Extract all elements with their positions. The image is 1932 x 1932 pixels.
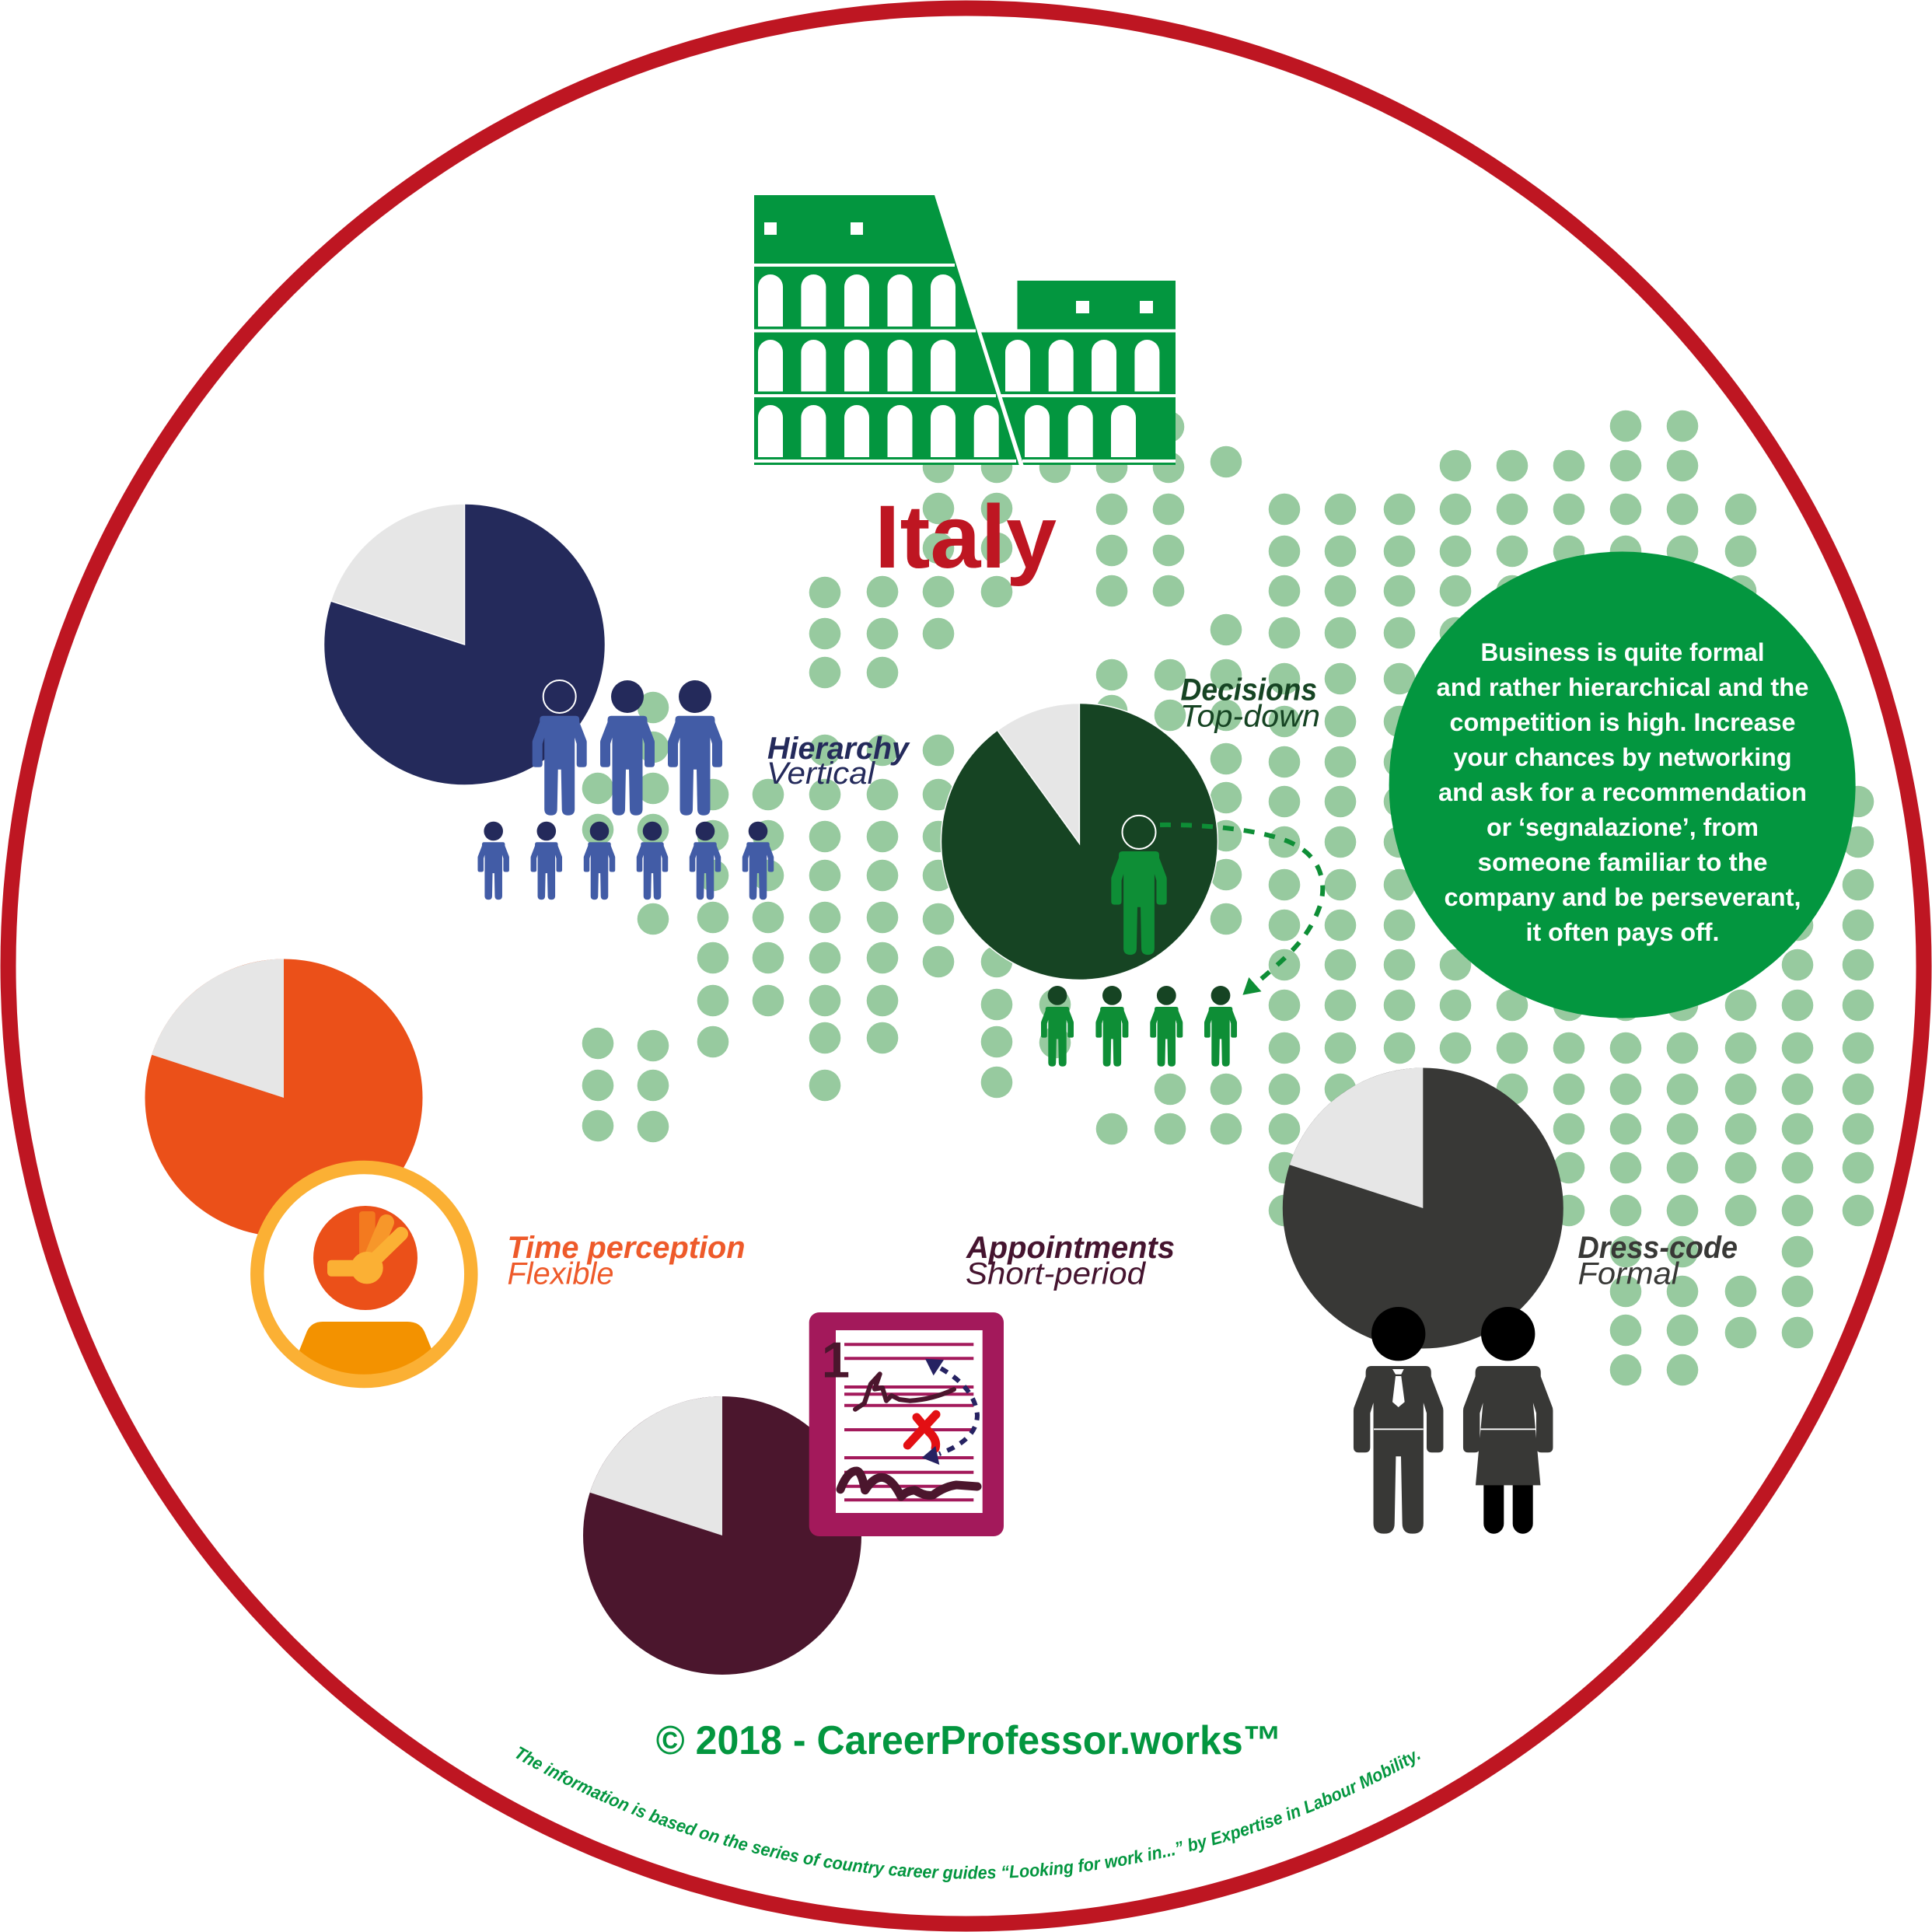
- callout text: it often pays off.: [1525, 918, 1720, 946]
- label: dress-code: Formal: [1578, 1257, 1679, 1291]
- panel: time perception: [145, 959, 745, 1399]
- pie chart: time perception: [145, 959, 423, 1236]
- callout text: company and be perseverant,: [1445, 883, 1801, 911]
- callout: advice circle: [1389, 552, 1856, 1018]
- copyright: © 2018 - CareerProfessor.works™: [656, 1718, 1282, 1763]
- callout text: or ‘segnalazione’, from: [1487, 813, 1759, 841]
- icon: person with clock: [257, 1168, 471, 1399]
- label: hierarchy: Hierarchy: [767, 732, 910, 766]
- label: time perception: [507, 1231, 745, 1291]
- label: dress-code: Dress-code: [1578, 1231, 1738, 1265]
- icon: man in suit: [1354, 1307, 1443, 1534]
- pie chart: appointments: [583, 1396, 861, 1675]
- label: time perception: Flexible: [507, 1257, 614, 1291]
- label: appointments: Appointments: [966, 1231, 1175, 1265]
- source note on curve: The information is based on the series of country career guides “Looking for work in...” by Expertise in Labour Mobility.: [515, 1746, 1420, 1882]
- pie chart: decisions: [941, 703, 1218, 980]
- icon: six staff: [477, 822, 774, 900]
- callout text: and ask for a recommendation: [1438, 778, 1807, 806]
- icon: Colosseum: [754, 195, 1176, 465]
- title: Italy: [875, 487, 1057, 587]
- panel: appointments: [583, 1231, 1175, 1675]
- label: hierarchy: [767, 732, 910, 791]
- callout text: and rather hierarchical and the: [1437, 673, 1808, 701]
- dotted world map: [598, 426, 1858, 1370]
- label: appointments: Short-period: [966, 1257, 1147, 1291]
- callout text: Business is quite formal: [1480, 638, 1765, 666]
- callout text: your chances by networking: [1454, 743, 1791, 771]
- pie chart: dress-code: [1283, 1068, 1563, 1348]
- panel: decisions: [941, 673, 1322, 1067]
- icon: three managers: [533, 680, 722, 816]
- panel: hierarchy: [323, 504, 910, 900]
- icon: decision maker: [1111, 816, 1167, 955]
- label: decisions: [1180, 673, 1320, 733]
- callout text: competition is high. Increase: [1449, 708, 1796, 736]
- label: decisions: Decisions: [1180, 673, 1317, 707]
- callout text: [1437, 638, 1808, 946]
- arrow: top-down: [1160, 825, 1322, 995]
- panel: dress-code: [1283, 1068, 1738, 1534]
- callout text: someone familiar to the: [1477, 848, 1768, 876]
- pie chart: hierarchy: [323, 504, 605, 785]
- label: appointments: [966, 1231, 1175, 1291]
- icon: woman in suit: [1463, 1307, 1553, 1534]
- label: dress-code: [1578, 1231, 1738, 1291]
- label: hierarchy: Vertical: [767, 756, 875, 791]
- label: time perception: Time perception: [507, 1231, 745, 1265]
- label: decisions: Top-down: [1180, 699, 1320, 733]
- icon: agenda document: 1: [822, 1332, 850, 1389]
- icon: four staff: [1041, 986, 1237, 1067]
- icon: agenda document: [809, 1312, 1004, 1536]
